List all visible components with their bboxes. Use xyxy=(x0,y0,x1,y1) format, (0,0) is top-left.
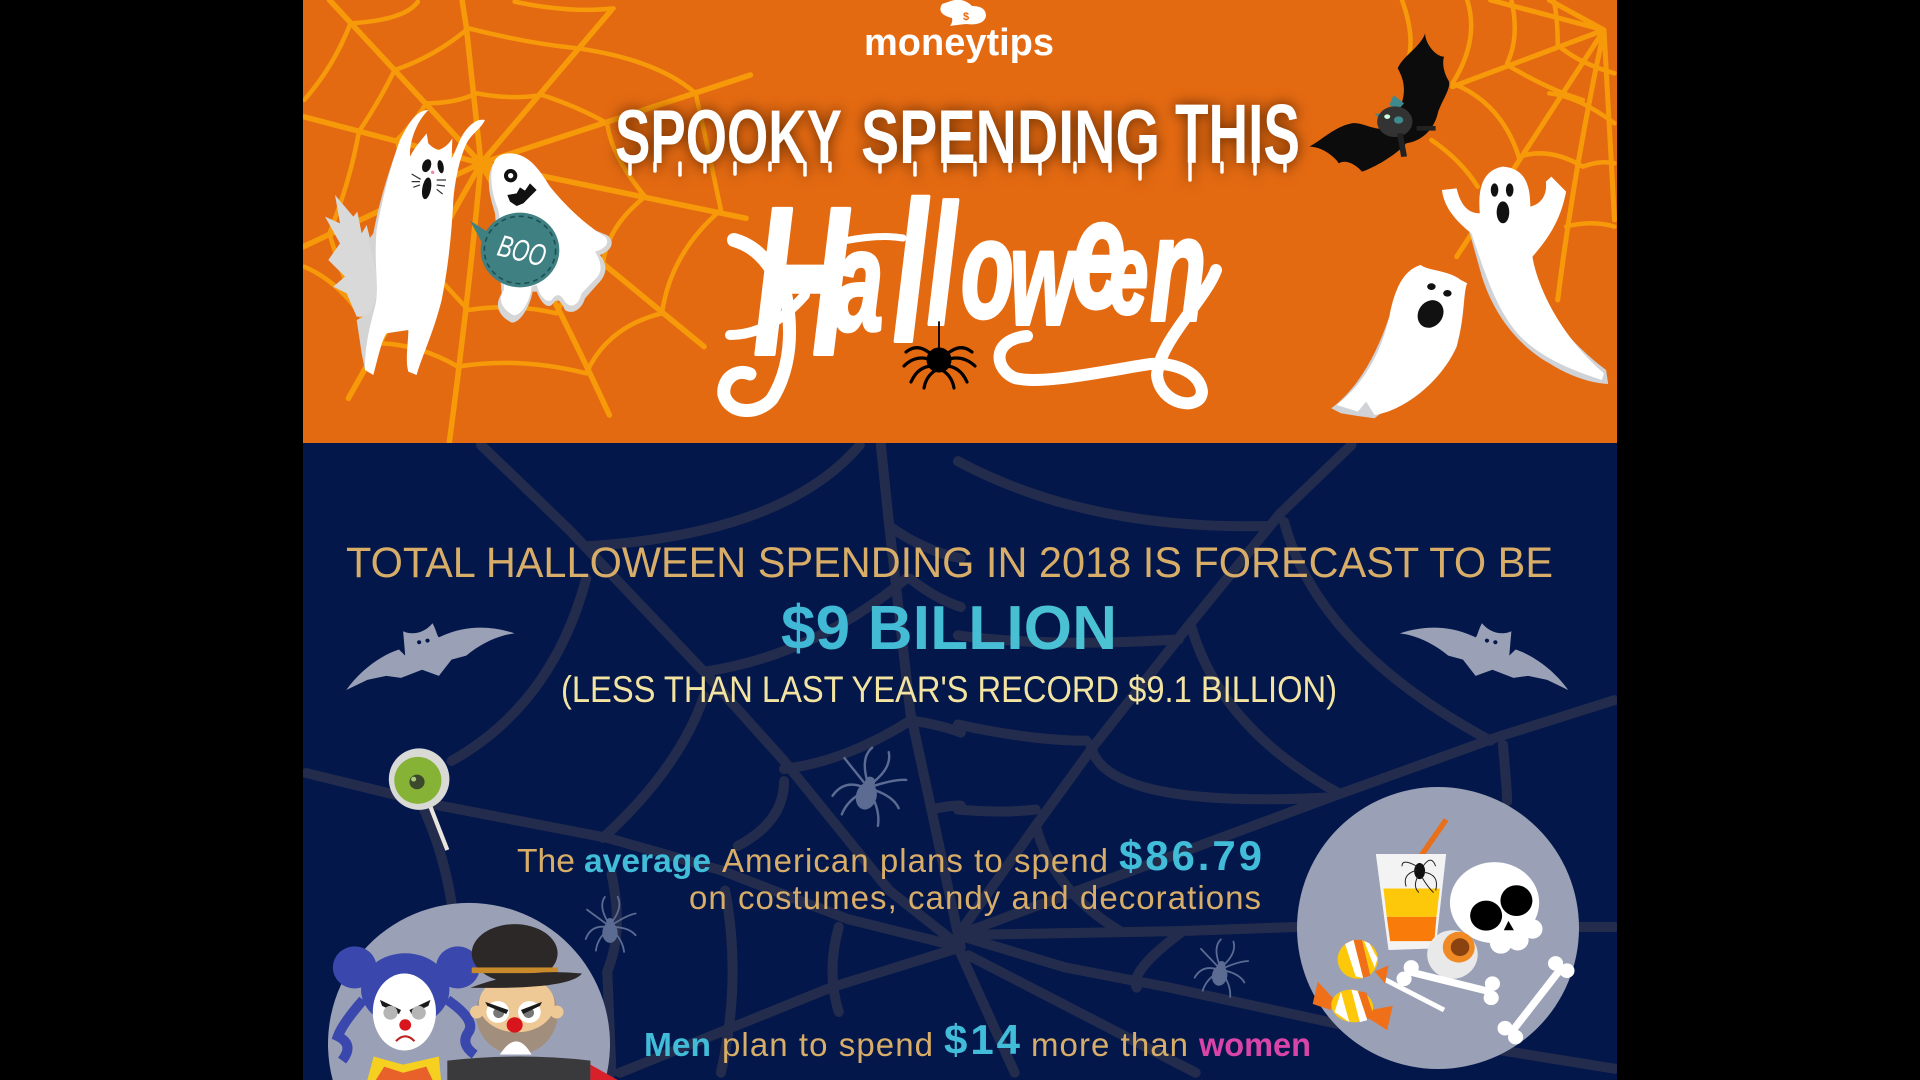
title: Halloween lettering: a xyxy=(834,201,883,361)
title: Halloween lettering: o xyxy=(961,191,1014,347)
panel: navy body xyxy=(303,443,1617,1080)
title: Halloween lettering: e xyxy=(1072,168,1125,341)
icon: skull xyxy=(1450,862,1543,954)
text: men versus women: Men xyxy=(644,1026,711,1063)
key figure: $9 billion: $9 BILLION xyxy=(781,594,1117,663)
illustration: white cat xyxy=(325,110,485,375)
text: average spend: $86.79 xyxy=(1119,832,1262,879)
text: men versus women: more than xyxy=(1031,1026,1188,1063)
title: spooky spending this: SPOOKY xyxy=(615,95,842,180)
text: men versus women: plan to spend xyxy=(722,1026,933,1063)
icon: candy corn drink xyxy=(1376,820,1446,950)
clown: woman xyxy=(333,946,480,1080)
icon: candies xyxy=(1313,940,1393,1030)
icon: hanging black spider xyxy=(904,322,975,388)
icon: bones xyxy=(1385,956,1575,1044)
icon: grey spiders xyxy=(586,741,1251,999)
text: men versus women xyxy=(644,1016,1311,1063)
illustration: tall ghost xyxy=(1442,167,1608,384)
title: spooky spending this xyxy=(615,87,1300,181)
text: average spend: average xyxy=(584,842,711,879)
logo: moneytips: moneytips xyxy=(864,22,1054,64)
title: Halloween lettering: e xyxy=(1109,211,1148,337)
title: Halloween lettering: l xyxy=(893,162,929,384)
icon: right grey bat xyxy=(1400,623,1568,690)
right orange spider web xyxy=(1402,0,1614,300)
title: Halloween lettering: l xyxy=(927,170,958,361)
logo: moneytips xyxy=(864,0,1054,64)
text: average spend: on costumes, candy and decorations xyxy=(689,879,1261,916)
left orange spider web xyxy=(303,0,750,442)
text: men versus women: $14 xyxy=(944,1016,1021,1063)
text: men versus women: women xyxy=(1198,1026,1311,1063)
illustration: clown circle xyxy=(328,903,618,1080)
text: average spend: The xyxy=(517,842,575,879)
icon: eyeball xyxy=(1427,930,1478,979)
illustration: small ghost xyxy=(1331,265,1467,418)
clown: man xyxy=(447,924,618,1080)
text: average spend xyxy=(517,832,1262,916)
logo: moneytips: $ xyxy=(963,11,969,23)
illustration: candy and skull circle xyxy=(1297,787,1579,1069)
title: Halloween lettering: n xyxy=(1150,188,1206,352)
dark spider web right half xyxy=(958,445,1614,1073)
illustration: ghost with boo bubble xyxy=(470,153,612,323)
illustration: black bat xyxy=(1309,33,1449,172)
heading: total spending forecast: TOTAL HALLOWEEN SPENDING IN 2018 IS FORECAST TO BE xyxy=(346,539,1553,587)
text: average spend: American plans to spend xyxy=(722,842,1108,879)
subheading: less than last year: (LESS THAN LAST YEAR'S RECORD $9.1 BILLION) xyxy=(561,669,1337,710)
speech bubble: boo xyxy=(470,213,559,287)
panel: orange header xyxy=(303,0,1617,443)
title: Halloween lettering xyxy=(724,162,1216,411)
speech bubble: boo: BOO xyxy=(494,229,549,273)
title: spooky spending this: THIS xyxy=(1175,87,1300,181)
title: Halloween lettering: w xyxy=(1010,201,1080,353)
icon: left grey bat xyxy=(346,623,515,690)
title: Halloween lettering: H xyxy=(753,164,850,400)
dark spider web left half xyxy=(306,445,961,1073)
title: spooky spending this: SPENDING xyxy=(861,95,1160,180)
icon: eyeball lollipop xyxy=(389,748,449,850)
